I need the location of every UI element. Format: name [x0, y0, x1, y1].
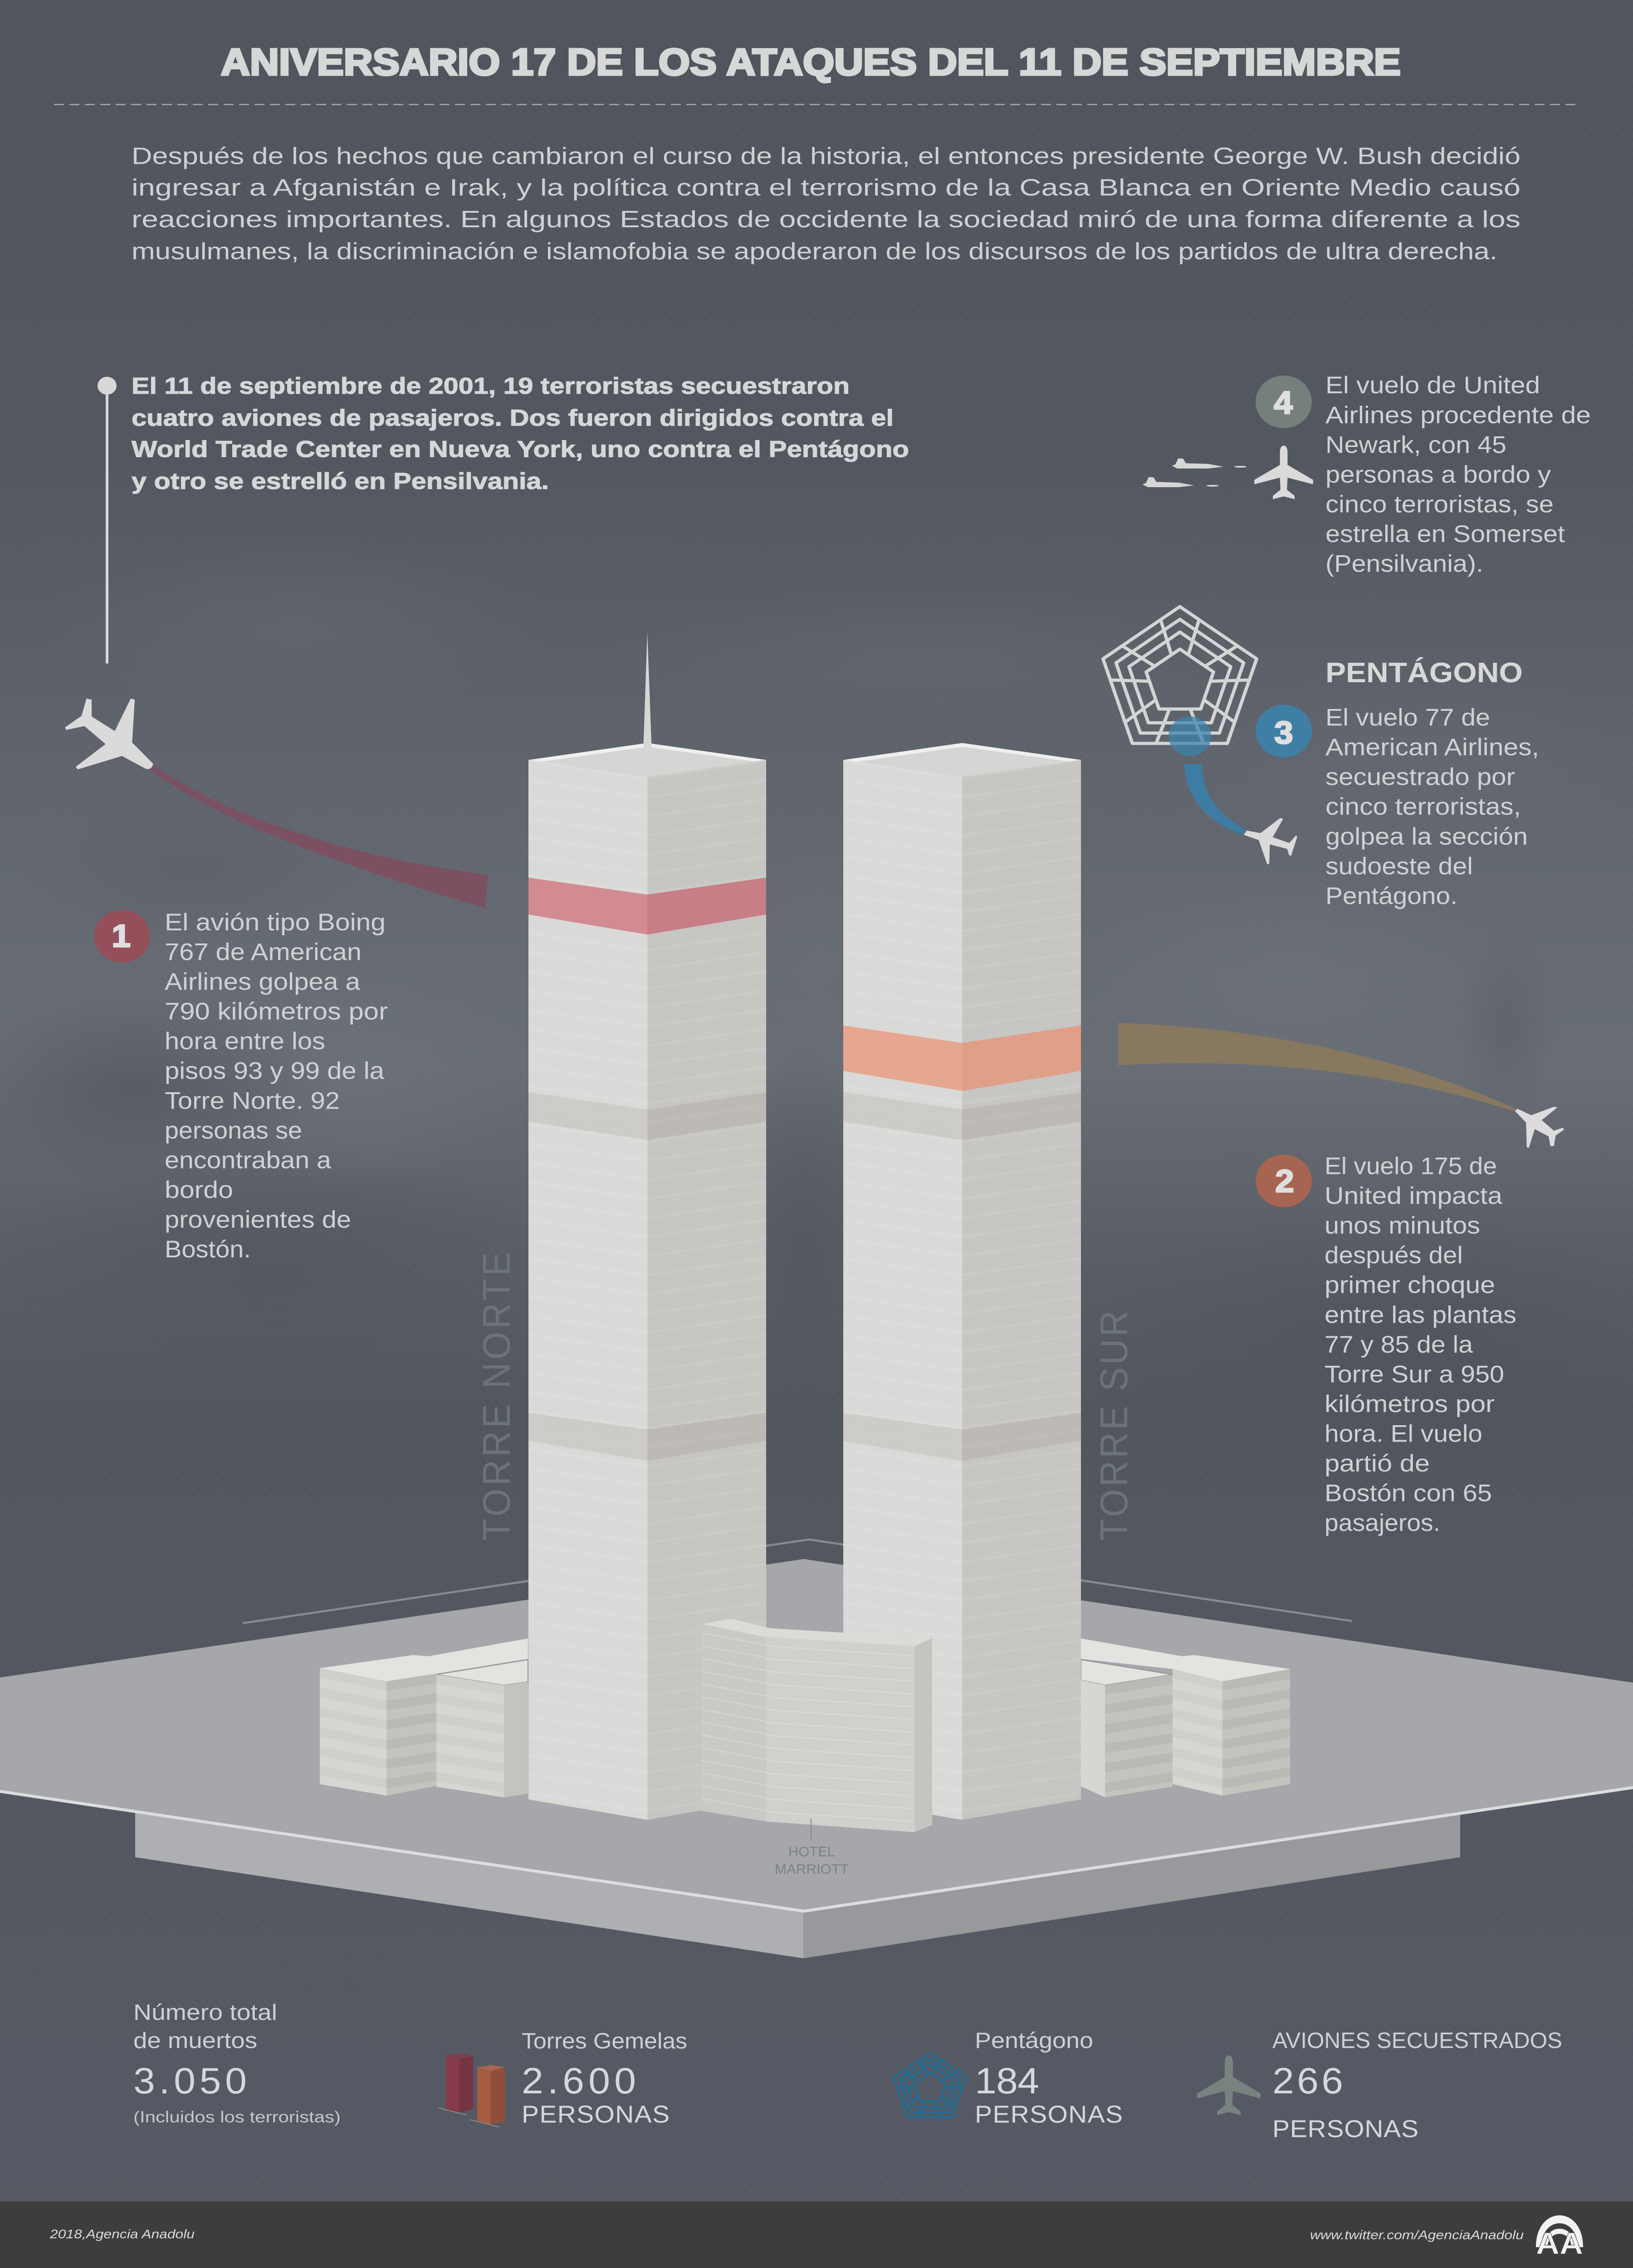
badge 3	[1256, 705, 1312, 758]
stat: pentagon	[975, 2028, 1123, 2128]
icon: plane 1	[65, 699, 153, 769]
plaza: isometric platform	[0, 1540, 1633, 1958]
impact zone: south tower	[843, 1026, 1081, 1091]
text block: flight 77: golpea la sección	[1325, 823, 1528, 850]
stat: hijacked planes: 266	[1272, 2061, 1343, 2101]
intro paragraph	[132, 143, 1521, 264]
trail: flight 77	[1184, 764, 1246, 835]
stat: hijacked planes: AVIONES SECUESTRADOS	[1272, 2028, 1562, 2053]
logo: Anadolu Agency: AA	[1536, 2226, 1583, 2261]
stat: pentagon: PERSONAS	[975, 2101, 1123, 2128]
text block: flight 175: primer choque	[1325, 1272, 1495, 1298]
text block: flight 1: Bostón.	[165, 1237, 251, 1263]
footer link: www.twitter.com/AgenciaAnadolu	[1310, 2228, 1524, 2242]
bold summary: El 11 de septiembre de 2001, 19 terroristas secuestraron	[132, 374, 850, 399]
text block: flight 175: después del	[1325, 1242, 1463, 1269]
stat: twin towers: PERSONAS	[522, 2101, 670, 2128]
intro paragraph: Después de los hechos que cambiaron el curso de la historia, el entonces presidente George W. Bush decidió	[132, 143, 1521, 169]
text block: flight 1: provenientes de	[165, 1207, 351, 1233]
icon: escort fighters	[1143, 458, 1247, 487]
text block: flight 175: Bostón con 65	[1325, 1480, 1492, 1506]
impact marker on pentagon	[1169, 716, 1211, 756]
label: Hotel Marriott: HOTEL	[788, 1843, 835, 1859]
badge 3: 3	[1274, 715, 1293, 750]
text block: flight 77: sudoeste del	[1325, 853, 1473, 880]
text block: flight 93	[1325, 372, 1591, 577]
text block: flight 1: personas se	[165, 1117, 302, 1144]
text block: flight 93: personas a bordo y	[1325, 461, 1551, 488]
stat: total deaths: Número total	[133, 2000, 277, 2025]
text block: flight 1: encontraban a	[165, 1147, 332, 1173]
stat: total deaths: 3.050	[133, 2061, 247, 2101]
text block: flight 175: 77 y 85 de la	[1325, 1331, 1473, 1358]
badge 4: 4	[1274, 385, 1293, 421]
stat: total deaths	[133, 2000, 341, 2126]
heading: Pentágono: PENTÁGONO	[1325, 657, 1523, 689]
icon: twin towers mini bars	[438, 2053, 505, 2127]
text block: flight 93: cinco terroristas, se	[1325, 491, 1554, 518]
callout 1 badge	[94, 910, 150, 963]
text block: flight 175: pasajeros.	[1325, 1510, 1440, 1536]
text block: flight 175: kilómetros por	[1325, 1391, 1495, 1418]
stat: hijacked planes: PERSONAS	[1272, 2115, 1418, 2142]
text block: flight 1: hora entre los	[165, 1028, 325, 1055]
text block: flight 77: Pentágono.	[1325, 883, 1457, 909]
text block: flight 77: cinco terroristas,	[1325, 794, 1521, 820]
bold summary: y otro se estrelló en Pensilvania.	[132, 469, 549, 494]
icon: pentagon	[1103, 606, 1257, 743]
text block: flight 175: United impacta	[1325, 1183, 1503, 1209]
intro paragraph: ingresar a Afganistán e Irak, y la política contra el terrorismo de la Casa Blanca en Oriente Medio causó	[132, 175, 1521, 200]
icon: plane 2	[1515, 1107, 1564, 1148]
text block: flight 175: partió de	[1325, 1451, 1430, 1477]
label: Torre Norte: TORRE NORTE	[475, 1252, 518, 1541]
bold summary	[132, 374, 909, 494]
stat: total deaths: (Incluidos los terroristas)	[133, 2108, 341, 2126]
text block: flight 175: El vuelo 175 de	[1325, 1153, 1497, 1179]
icon: plane 3	[1244, 818, 1297, 864]
text block: flight 77: secuestrado por	[1325, 764, 1515, 790]
stat: pentagon: Pentágono	[975, 2028, 1093, 2053]
text block: flight 1: Torre Norte. 92	[165, 1088, 340, 1114]
text block: flight 93: El vuelo de United	[1325, 372, 1540, 399]
text block: flight 1: 790 kilómetros por	[165, 998, 388, 1025]
badge 2: 2	[1275, 1163, 1294, 1199]
icon: gray plane	[1197, 2055, 1261, 2115]
text block: flight 1: 767 de American	[165, 939, 362, 965]
stat: hijacked planes	[1272, 2028, 1562, 2142]
text block: flight 93: Newark, con 45	[1325, 432, 1506, 458]
label: Hotel Marriott: MARRIOTT	[775, 1861, 849, 1877]
stat: total deaths: de muertos	[133, 2028, 257, 2053]
text block: flight 93: (Pensilvania).	[1325, 551, 1483, 577]
antenna	[643, 632, 652, 766]
title: ANIVERSARIO 17 DE LOS ATAQUES DEL 11 DE SEPTIEMBRE	[221, 41, 1401, 83]
stat: twin towers	[522, 2028, 687, 2128]
text block: flight 1: Airlines golpea a	[165, 969, 361, 995]
text block: flight 175: Torre Sur a 950	[1325, 1361, 1504, 1388]
text block: flight 77: American Airlines,	[1325, 734, 1539, 761]
text block: flight 1: El avión tipo Boing	[165, 909, 386, 936]
text block: flight 1: pisos 93 y 99 de la	[165, 1058, 385, 1084]
impact zone: north tower	[528, 878, 766, 934]
trail: flight 175	[1118, 1023, 1516, 1111]
building: right annexes	[1081, 1638, 1290, 1797]
bold summary: World Trade Center en Nueva York, uno contra el Pentágono	[132, 437, 909, 462]
text block: flight 93: estrella en Somerset	[1325, 521, 1565, 547]
text block: flight 93: Airlines procedente de	[1325, 402, 1591, 428]
building: left annexes	[320, 1638, 528, 1797]
text block: flight 1: bordo	[165, 1177, 233, 1203]
icon: blue pentagon	[894, 2053, 966, 2117]
text block: flight 175: entre las plantas	[1325, 1302, 1516, 1328]
text block: flight 77: El vuelo 77 de	[1325, 704, 1490, 731]
text block: flight 77	[1325, 704, 1539, 909]
stat: twin towers: Torres Gemelas	[522, 2028, 687, 2053]
icon: plane 4	[1254, 445, 1313, 499]
badge 4	[1256, 376, 1312, 428]
tower: North	[528, 632, 766, 1820]
bold summary: cuatro aviones de pasajeros. Dos fueron dirigidos contra el	[132, 406, 894, 431]
pin line marker	[98, 377, 117, 664]
intro paragraph: musulmanes, la discriminación e islamofobia se apoderaron de los discursos de los partidos de ultra derecha.	[132, 239, 1497, 264]
text block: flight 1	[165, 909, 388, 1263]
footer bar	[0, 2201, 1633, 2268]
text block: flight 175: hora. El vuelo	[1325, 1421, 1482, 1447]
callout 1 badge: 1	[112, 919, 131, 954]
text block: flight 175: unos minutos	[1325, 1212, 1480, 1239]
tower: South	[843, 743, 1081, 1820]
trail: flight 1	[148, 766, 488, 908]
building: Hotel Marriott	[702, 1619, 932, 1832]
stat: twin towers: 2.600	[522, 2061, 636, 2101]
intro paragraph: reacciones importantes. En algunos Estados de occidente la sociedad miró de una forma diferente a los	[132, 207, 1521, 233]
label: Torre Sur: TORRE SUR	[1093, 1310, 1136, 1541]
badge 2	[1256, 1154, 1312, 1207]
footer credit: 2018,Agencia Anadolu	[49, 2227, 195, 2241]
stat: pentagon: 184	[975, 2061, 1039, 2101]
label: Hotel Marriott	[775, 1818, 849, 1877]
text block: flight 175	[1325, 1153, 1516, 1536]
